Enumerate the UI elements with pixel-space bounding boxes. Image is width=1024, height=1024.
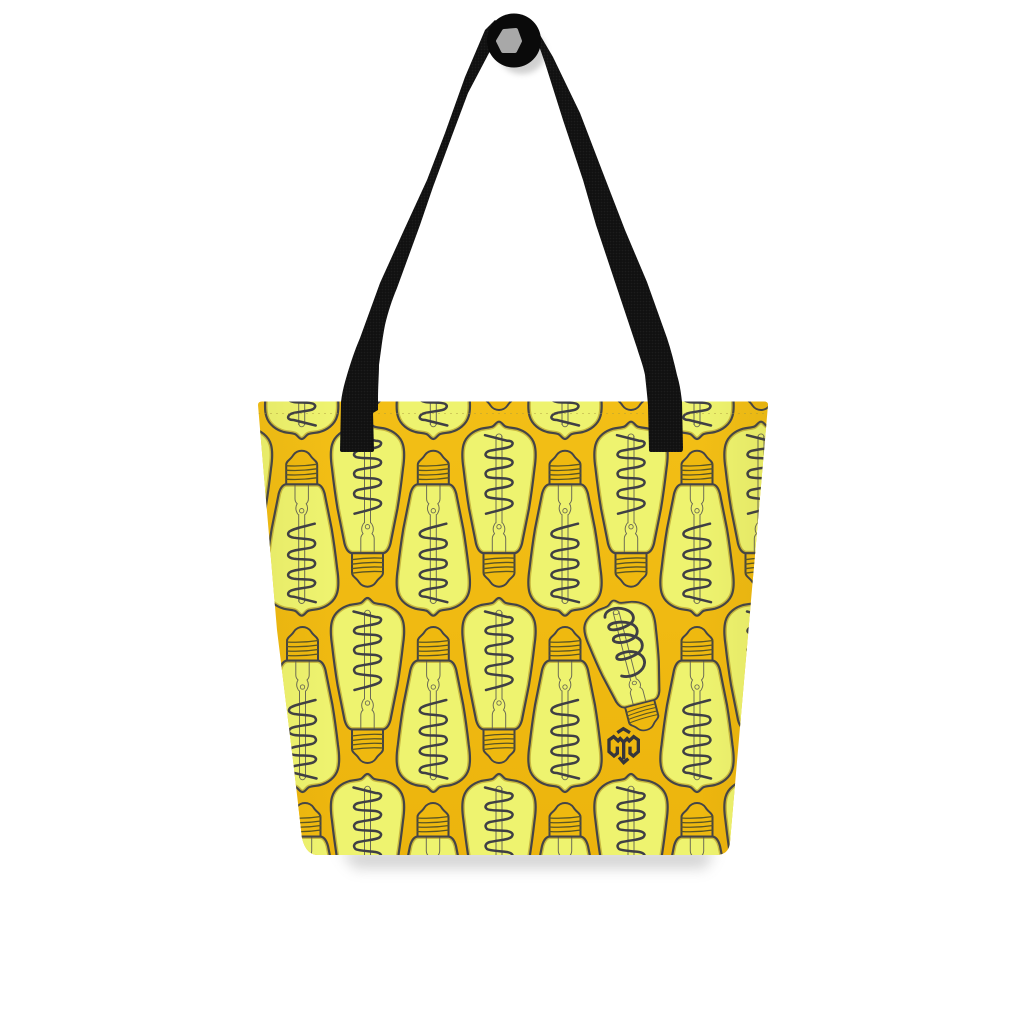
tilted odd-one-out bulb <box>583 600 660 732</box>
bulb row 1 column 3 <box>528 451 602 616</box>
brand logo mark <box>609 729 638 763</box>
inverted bulb row 1 column 5 <box>723 420 766 584</box>
inverted bulb row 1 column 1 <box>260 430 274 509</box>
right strap <box>520 18 683 452</box>
bulb row 2 column 2 <box>397 627 470 792</box>
bulb row 1 column 4 <box>660 451 734 616</box>
inverted bulb top row column 2 <box>378 402 381 404</box>
inverted bulb row 2 column 3 <box>462 598 536 763</box>
nail shadow <box>498 30 546 74</box>
inverted bulb row 2 column 5 <box>723 602 751 727</box>
bag ground shadow <box>340 850 715 868</box>
inverted bulb row 3 column 4 <box>593 772 669 855</box>
bulb row 2 column 4 <box>660 627 734 792</box>
inverted bulb row 3 column 3 <box>461 772 537 855</box>
strap top loop around nail <box>487 14 541 68</box>
inverted bulb row 1 column 4 <box>594 422 668 587</box>
bulb row 3 column 2 <box>407 802 459 855</box>
bulb row 3 column 4 <box>671 802 723 855</box>
bulb row 0 column 4 <box>682 402 735 440</box>
inverted bulb row 2 column 2 <box>331 598 404 763</box>
bulb row 2 column 3 <box>528 627 602 792</box>
bag front panel with bulb pattern <box>258 402 768 855</box>
bulb row 0 column 1 <box>264 402 340 440</box>
bulb row 0 column 3 <box>527 402 603 440</box>
bulb row 1 column 1 <box>265 451 338 616</box>
bulb row 3 column 3 <box>539 802 591 855</box>
inverted bulb top row column 5 <box>748 402 768 411</box>
inverted bulb row 3 column 5 <box>723 783 736 849</box>
bulb row 1 column 2 <box>397 451 470 616</box>
stitched hem line <box>258 413 764 414</box>
nail head <box>498 30 520 51</box>
left strap <box>340 20 510 452</box>
bulb row 3 column 1 <box>298 802 331 855</box>
edge shading <box>261 402 768 640</box>
inverted bulb top row column 3 <box>486 402 512 411</box>
bulb row 2 column 1 <box>281 626 340 794</box>
tote bag product scene <box>258 14 768 874</box>
inverted bulb top row column 4 <box>618 402 644 411</box>
bulb row 0 column 2 <box>396 402 472 440</box>
inverted bulb row 3 column 2 <box>330 772 406 855</box>
inverted bulb row 1 column 2 <box>331 422 404 587</box>
inverted bulb row 1 column 3 <box>462 422 536 587</box>
